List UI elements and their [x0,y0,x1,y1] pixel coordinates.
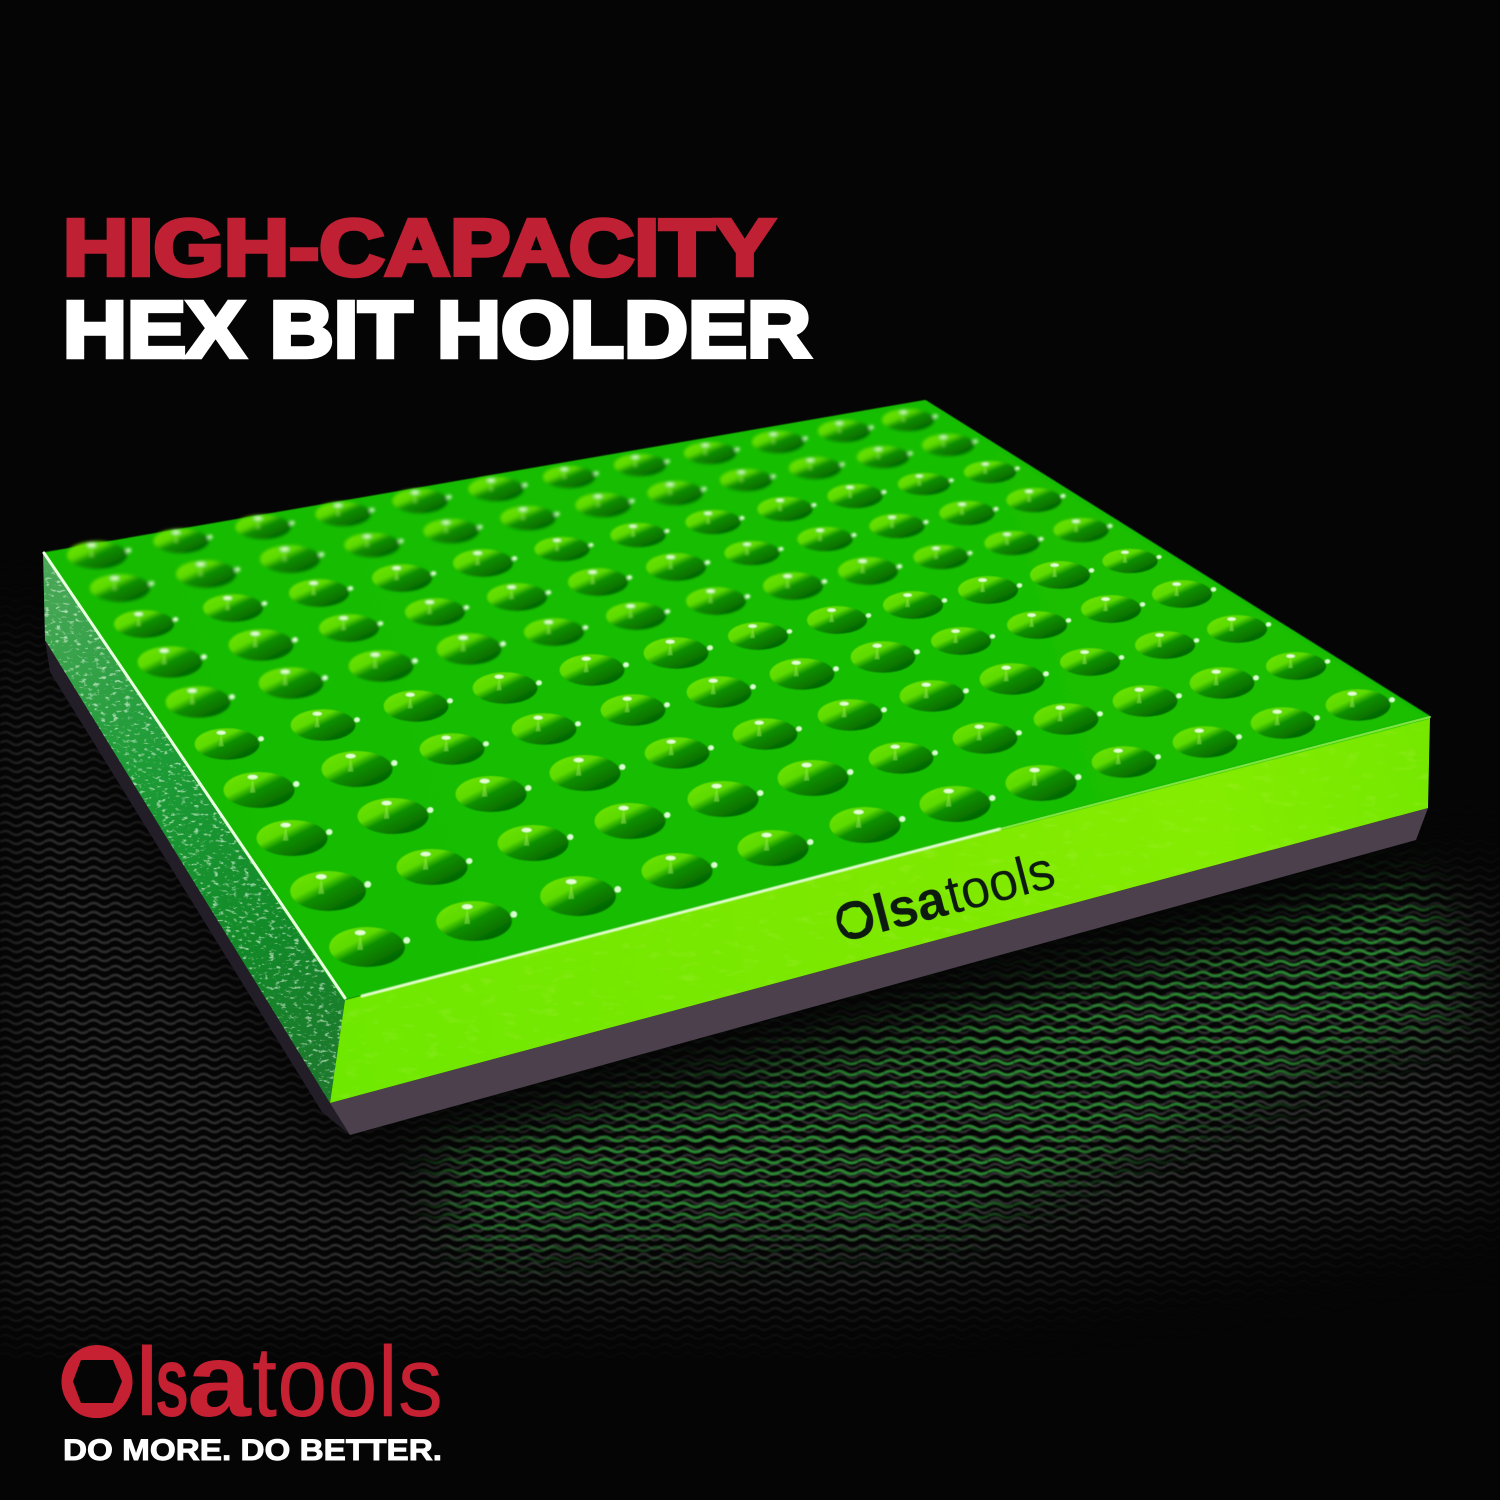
title line 1: HIGH-CAPACITY [63,203,775,292]
front side wall [330,715,1430,1105]
product: hex bit holder [40,402,1430,1135]
rubber base, front side [330,808,1428,1135]
title [63,203,811,374]
logo wordmark: l [137,1327,157,1436]
logo wordmark: O [60,1329,134,1438]
rubber base, left side [45,640,350,1135]
middle rows of sockets [114,461,1113,718]
brand mark on front wall: Olsa [828,868,953,955]
brand mark on front wall: tools [939,840,1061,926]
brand mark on front wall [828,840,1061,955]
green reflection on fabric [408,861,1494,1284]
logo wordmark: tools [252,1326,443,1438]
rear rows of sockets [67,409,978,602]
top face [46,402,1428,998]
logo wordmark [60,1323,443,1439]
tagline: DO MORE. DO BETTER. [63,1434,442,1467]
fabric texture [0,642,1500,1346]
hole grid: 12 by 10 sockets [67,409,1395,967]
front rows of sockets [195,549,1395,967]
edge highlights [44,553,1430,998]
left side wall [40,545,350,1110]
logo wordmark: s [155,1326,189,1438]
logo wordmark: a [187,1323,252,1439]
brand logo [60,1323,443,1467]
title line 2: HEX BIT HOLDER [63,285,811,374]
